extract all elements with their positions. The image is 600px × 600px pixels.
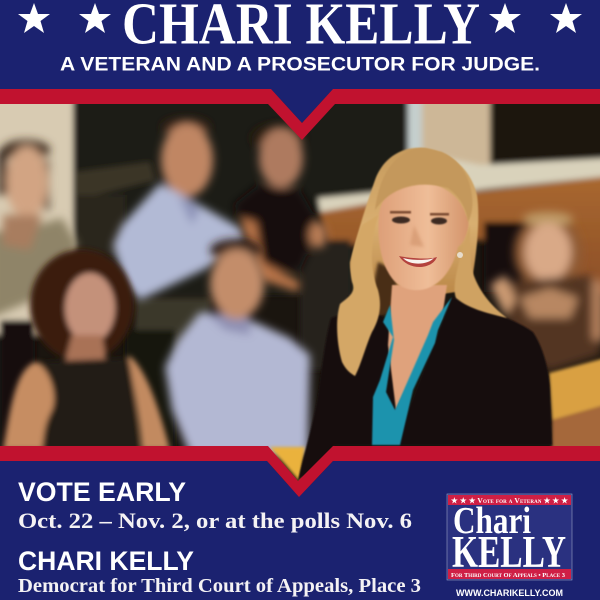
- candidate: Chari Kelly: [298, 148, 552, 481]
- bottom navy panel: [0, 461, 600, 600]
- candidate smile: [399, 256, 437, 267]
- candidate hair right lock: [455, 225, 507, 318]
- candidate jacket: [298, 297, 552, 481]
- logo name: Chari: Chari: [453, 500, 531, 542]
- candidate hair front: [375, 148, 472, 222]
- logo top red strip: ★ ★ ★ Vote for a Veteran ★ ★ ★: [451, 496, 569, 505]
- candidate eyes and brows: [390, 211, 449, 224]
- stars right: [489, 3, 582, 33]
- candidate hair shadow: [373, 262, 400, 318]
- text: early voting dates: Oct. 22 – Nov. 2, or at the polls Nov. 6: [18, 508, 412, 533]
- text: race description: Democrat for Third Court of Appeals, Place 3: [18, 575, 421, 597]
- background: courtroom walls and wood paneling: [0, 95, 600, 450]
- juror: man in front row: [165, 239, 310, 455]
- candidate nose shadow: [410, 225, 424, 247]
- candidate hair left lock: [337, 215, 380, 376]
- heading: vote early: VOTE EARLY: [18, 477, 186, 507]
- logo bottom red strip: For Third Court Of Appeals • Place 3: [451, 572, 566, 579]
- bottom red band with chevron: [0, 446, 600, 497]
- candidate hair back: [350, 148, 478, 300]
- juror: woman in black: [233, 124, 327, 292]
- candidate face: [378, 182, 468, 290]
- juror: man in light blue shirt: [113, 118, 245, 300]
- candidate neck and chest: [388, 285, 447, 410]
- juror: man in olive shirt: [0, 140, 78, 318]
- juror: blonde woman on right: [490, 212, 600, 372]
- photo: courtroom jury and candidate: [0, 95, 600, 485]
- website url: WWW.CHARIKELLY.COM: [456, 588, 563, 598]
- logo: campaign sign: [447, 494, 572, 580]
- juror: curly-haired woman in front row: [3, 249, 170, 450]
- stars left: [18, 3, 111, 33]
- candidate teal blouse: [372, 297, 452, 445]
- top red band with chevron: [0, 89, 600, 140]
- jury box wood rail: [270, 358, 600, 482]
- candidate earring: [457, 252, 463, 258]
- heading: candidate name: CHARI KELLY: [18, 546, 194, 576]
- top navy banner with chevron: [0, 0, 600, 123]
- subtitle: A VETERAN AND A PROSECUTOR FOR JUDGE.: [60, 54, 540, 76]
